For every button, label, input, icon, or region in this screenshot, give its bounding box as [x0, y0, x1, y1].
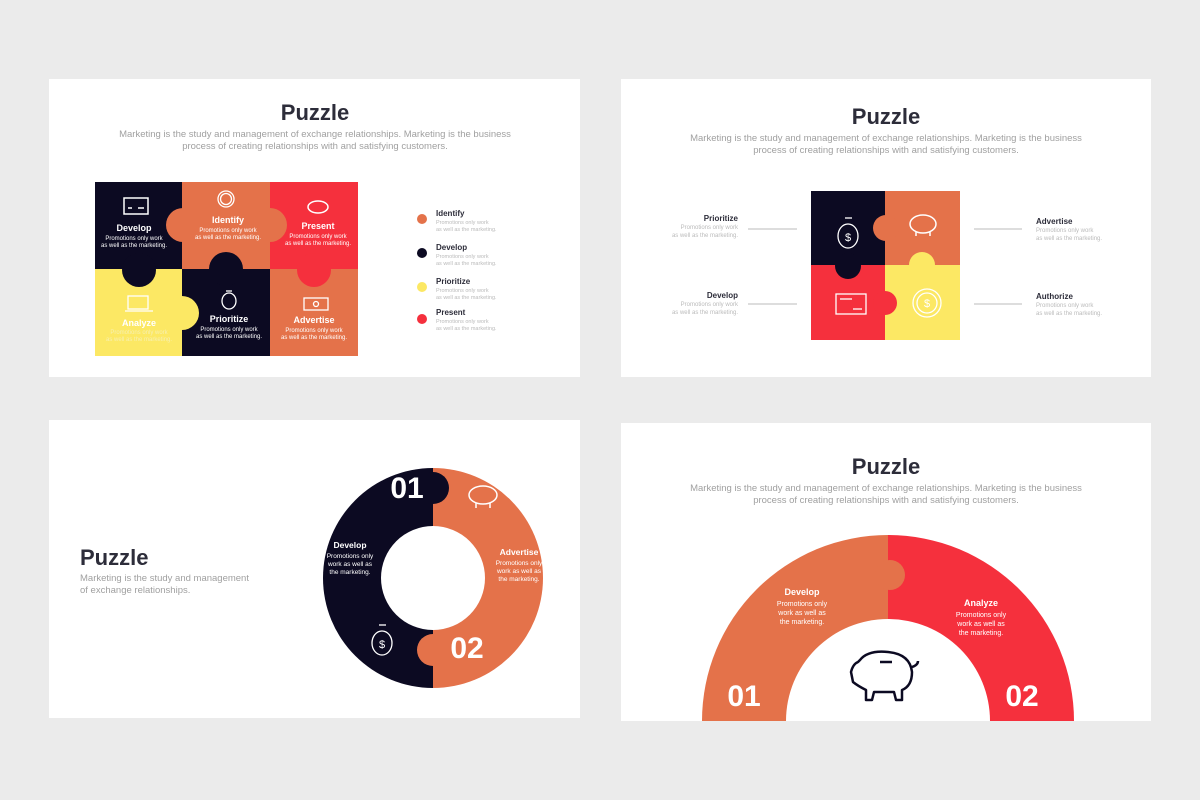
- puzzle grid: Promotions only work: [105, 236, 164, 242]
- semicircle chart: the marketing.: [780, 619, 824, 626]
- legend: as well as the marketing.: [436, 261, 497, 267]
- side labels: as well as the marketing.: [1036, 311, 1102, 317]
- subtitle: Marketing is the study and management: [80, 573, 249, 584]
- legend: Identify: [436, 209, 465, 218]
- title: Puzzle: [852, 454, 920, 479]
- icon: coin: [218, 191, 234, 207]
- semicircle chart: Develop: [784, 587, 820, 597]
- semicircle chart: Promotions only: [777, 601, 828, 608]
- icon: coin: [913, 289, 941, 317]
- semicircle chart: the marketing.: [959, 630, 1003, 637]
- subtitle: [690, 483, 1082, 506]
- side labels: Promotions only work: [681, 302, 739, 308]
- ring chart: work as well as: [327, 561, 373, 568]
- puzzle grid: Promotions only work: [289, 234, 348, 240]
- subtitle: [690, 133, 1082, 156]
- side labels: Advertise: [1036, 217, 1073, 226]
- side labels: Develop: [707, 291, 738, 300]
- ring chart: Develop: [333, 540, 367, 550]
- subtitle: Marketing is the study and management of exchange relationships. Marketing is the business: [119, 129, 511, 140]
- icon: laptop: [125, 296, 153, 311]
- icon: coin: $: [924, 298, 930, 310]
- ring chart: Advertise: [500, 547, 539, 557]
- puzzle grid: Identify: [212, 215, 244, 225]
- puzzle grid: Develop: [116, 223, 152, 233]
- subtitle: Marketing is the study and management of exchange relationships. Marketing is the business: [690, 483, 1082, 494]
- semicircle chart: work as well as: [956, 621, 1005, 628]
- legend: Promotions only work: [436, 288, 489, 294]
- panel: top-right 2x2 puzzle: [621, 79, 1151, 377]
- semicircle chart: 02: [1005, 680, 1039, 713]
- puzzle grid: Promotions only work: [200, 327, 259, 333]
- ring chart: Promotions only: [496, 560, 543, 567]
- semicircle chart: 01: [727, 680, 761, 713]
- semicircle chart: [702, 535, 1074, 721]
- icon: piggy bank: [851, 652, 918, 700]
- ring chart: Promotions only: [327, 553, 374, 560]
- icon: pig: [469, 486, 497, 508]
- puzzle grid: as well as the marketing.: [106, 337, 172, 343]
- ring chart: 01: [390, 472, 424, 505]
- puzzle grid: as well as the marketing.: [195, 235, 261, 241]
- puzzle grid: Promotions only work: [285, 328, 344, 334]
- panel: bottom-right semicircle puzzle: [621, 423, 1151, 721]
- side labels: Promotions only work: [681, 225, 739, 231]
- ring chart: the marketing.: [329, 569, 371, 576]
- ring chart: [323, 468, 543, 688]
- subtitle: Marketing is the study and management of exchange relationships. Marketing is the business: [690, 133, 1082, 144]
- puzzle grid: Prioritize: [210, 314, 248, 324]
- title: Puzzle: [852, 104, 920, 129]
- puzzle grid: Analyze: [122, 318, 156, 328]
- semicircle chart: work as well as: [777, 610, 826, 617]
- puzzle grid: [95, 182, 358, 356]
- subtitle: process of creating relationships with and satisfying customers.: [753, 495, 1019, 506]
- ring chart: 02: [450, 632, 484, 665]
- puzzle square: [811, 191, 960, 340]
- icon: money bag: [838, 218, 858, 248]
- subtitle: of exchange relationships.: [80, 585, 190, 596]
- legend: Present: [436, 308, 466, 317]
- subtitle: [80, 573, 249, 596]
- legend: as well as the marketing.: [436, 227, 497, 233]
- panel: top-left puzzle grid: [49, 79, 580, 377]
- icon: pig: [910, 215, 936, 236]
- ring chart: the marketing.: [498, 576, 540, 583]
- legend: Promotions only work: [436, 319, 489, 325]
- icon: money bag: [372, 625, 392, 655]
- puzzle grid: as well as the marketing.: [196, 334, 262, 340]
- legend: Promotions only work: [436, 254, 489, 260]
- legend: Develop: [436, 243, 467, 252]
- puzzle grid: as well as the marketing.: [281, 335, 347, 341]
- puzzle grid: Present: [301, 221, 335, 231]
- icon: money bag: $: [845, 232, 851, 244]
- puzzle grid: as well as the marketing.: [101, 243, 167, 249]
- semicircle chart: Promotions only: [956, 612, 1007, 619]
- legend: as well as the marketing.: [436, 295, 497, 301]
- puzzle grid: Advertise: [293, 315, 335, 325]
- legend: Promotions only work: [436, 220, 489, 226]
- side labels: as well as the marketing.: [1036, 236, 1102, 242]
- side labels: as well as the marketing.: [672, 233, 738, 239]
- icon: bill: [304, 298, 328, 310]
- legend: Prioritize: [436, 277, 471, 286]
- title: Puzzle: [281, 100, 349, 125]
- side labels: [672, 214, 1102, 317]
- icon: pig: [308, 201, 328, 213]
- subtitle: [119, 129, 511, 152]
- puzzle grid: Promotions only work: [110, 330, 169, 336]
- icon: card: [124, 198, 148, 214]
- subtitle: process of creating relationships with and satisfying customers.: [753, 145, 1019, 156]
- title: Puzzle: [80, 545, 148, 570]
- icon: money bag: $: [379, 639, 385, 651]
- ring chart: work as well as: [496, 568, 542, 575]
- side labels: Promotions only work: [1036, 228, 1094, 234]
- side labels: Promotions only work: [1036, 303, 1094, 309]
- icon: money bag: [222, 291, 236, 309]
- legend: [417, 209, 497, 332]
- legend: as well as the marketing.: [436, 326, 497, 332]
- side labels: as well as the marketing.: [672, 310, 738, 316]
- side labels: Prioritize: [704, 214, 739, 223]
- puzzle grid: as well as the marketing.: [285, 241, 351, 247]
- semicircle chart: Analyze: [964, 598, 998, 608]
- subtitle: process of creating relationships with and satisfying customers.: [182, 141, 448, 152]
- icon: card: [836, 294, 866, 314]
- puzzle grid: Promotions only work: [199, 228, 258, 234]
- side labels: Authorize: [1036, 292, 1073, 301]
- panel: bottom-left ring puzzle: [49, 420, 580, 718]
